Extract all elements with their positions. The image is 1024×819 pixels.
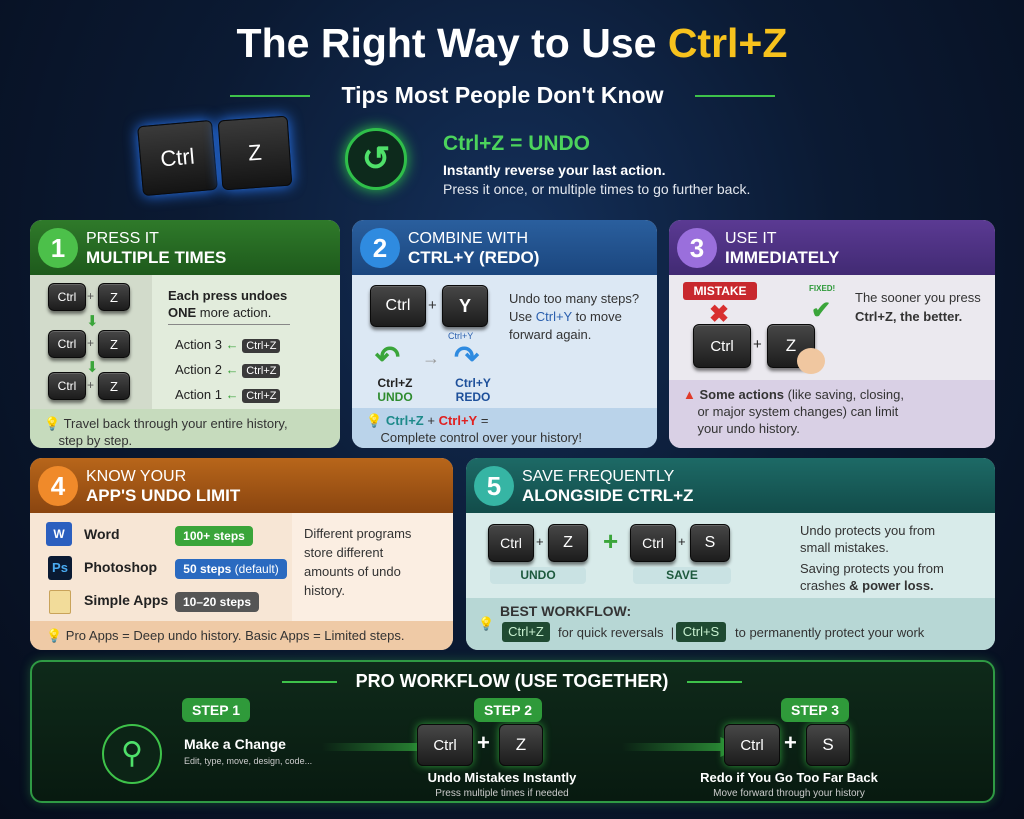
step 3: Move forward through your history: [713, 788, 865, 799]
step 2: +: [477, 730, 490, 755]
step 2: Undo Mistakes Instantly: [428, 770, 576, 785]
undo + save keys: +: [536, 534, 544, 549]
best workflow: for quick reversals |: [558, 625, 674, 640]
undo + save keys: +: [678, 534, 686, 549]
panel 3: [669, 220, 995, 448]
step 1: [102, 698, 312, 784]
key stack: [46, 283, 132, 406]
step 1: Edit, type, move, design, code...: [184, 756, 312, 766]
text: [168, 288, 287, 320]
panel 5: SAVE FREQUENTLY: [522, 468, 674, 485]
panel 5: [466, 458, 995, 650]
panel 4: 4: [51, 470, 65, 500]
app list: Ps: [52, 560, 68, 575]
app list: Simple Apps: [84, 592, 168, 608]
key stack: Ctrl: [58, 379, 76, 393]
undo + save keys: [486, 524, 732, 584]
undo redo icons: UNDO: [377, 390, 413, 404]
footer: Complete control over your history!: [380, 430, 582, 445]
undo redo icons: ↷: [454, 341, 479, 374]
footer tip: [30, 409, 340, 448]
warning footer: ▲ Some actions (like saving, closing,: [683, 387, 904, 402]
action list: Action 3 ← Ctrl+Z: [175, 337, 276, 352]
best workflow: Ctrl+S: [683, 624, 719, 639]
panel 2: Ctrl+Y: [448, 331, 473, 341]
best workflow: 💡: [478, 616, 494, 631]
panel 2: [352, 220, 657, 448]
subtitle: Tips Most People Don't Know: [342, 82, 663, 108]
arrow 2: [630, 737, 724, 757]
footer tip: step by step.: [58, 433, 132, 448]
step 3: Redo if You Go Too Far Back: [700, 770, 878, 785]
title: The Right Way to Use Ctrl+Z: [237, 20, 787, 66]
step 2: Press multiple times if needed: [435, 788, 569, 799]
text: [509, 291, 639, 342]
key stack: +: [87, 289, 94, 303]
hero text: Ctrl+Z = UNDO: [443, 132, 590, 155]
panel 2: COMBINE WITH: [408, 230, 528, 247]
step 3: STEP 3: [791, 702, 839, 718]
text: Each press undoes: [168, 288, 287, 303]
keys ctrl+y: +: [428, 297, 437, 314]
panel 5: Undo protects you from small mistakes.: [800, 523, 935, 555]
undo + save keys: UNDO: [520, 568, 556, 582]
undo + save keys: Ctrl: [642, 535, 664, 551]
undo redo icons: REDO: [456, 390, 490, 404]
footer: [30, 621, 453, 650]
panel 5: Saving protects you from crashes & power loss.: [800, 561, 944, 593]
undo + save keys: S: [705, 534, 715, 551]
step 2: Z: [516, 735, 526, 754]
panel 2: 2: [373, 232, 387, 262]
footer: 💡 Pro Apps = Deep undo history. Basic Apps = Limited steps.: [46, 628, 404, 643]
workflow heading: PRO WORKFLOW (USE TOGETHER): [356, 671, 668, 691]
action list: Action 2 ← Ctrl+Z: [175, 362, 276, 377]
keys ctrl+y: Ctrl: [386, 297, 410, 314]
panel 3: IMMEDIATELY: [725, 248, 839, 267]
hero text: Instantly reverse your last action.: [443, 162, 666, 178]
text: Use Ctrl+Y to move: [509, 309, 622, 324]
best workflow: Ctrl+Z: [508, 624, 544, 639]
app list: [46, 522, 287, 614]
best workflow: [466, 598, 995, 650]
panel 3: USE IT: [725, 230, 777, 247]
panel 4: APP'S UNDO LIMIT: [86, 486, 240, 505]
panel 4: [30, 458, 453, 650]
app list: 50 steps: [183, 562, 231, 576]
warning footer: [669, 380, 995, 448]
footer: 💡 Ctrl+Z + Ctrl+Y =: [366, 413, 488, 428]
footer tip: 💡 Travel back through your entire history,: [44, 416, 288, 431]
step 1: STEP 1: [192, 702, 240, 718]
mistake label: MISTAKE: [693, 284, 747, 298]
panel 3: +: [753, 336, 762, 353]
hero keys: Ctrl: [159, 144, 196, 171]
app list: W: [53, 527, 65, 541]
key stack: Z: [110, 336, 118, 352]
key stack: ⬇: [86, 313, 99, 330]
step 2: [412, 698, 576, 799]
panel 5: ALONGSIDE CTRL+Z: [522, 486, 693, 505]
step 1: Make a Change: [184, 736, 286, 752]
hero keys: Z: [247, 140, 263, 165]
panel 5: 5: [487, 470, 501, 500]
panel 1: 1: [51, 232, 65, 262]
keys: Ctrl: [710, 338, 734, 354]
keys: [693, 324, 751, 368]
undo redo icons: →: [422, 348, 440, 368]
panel 3: Ctrl+Z, the better.: [855, 309, 962, 324]
undo + save keys: Ctrl: [500, 535, 522, 551]
footer: [352, 408, 657, 448]
warning footer: your undo history.: [697, 421, 800, 436]
panel 3: The sooner you press: [855, 290, 981, 305]
app list: 10–20 steps: [183, 595, 251, 609]
step 1: ⚲: [121, 737, 143, 770]
keys ctrl+y: [368, 285, 490, 332]
warning footer: or major system changes) can limit: [697, 404, 898, 419]
key stack: Ctrl: [58, 290, 76, 304]
app list: (default): [235, 562, 279, 576]
undo redo icons: Ctrl+Y: [455, 376, 491, 390]
key stack: Ctrl: [58, 337, 76, 351]
pro workflow panel: [30, 660, 995, 803]
key stack: Z: [110, 378, 118, 394]
undo + save keys: +: [603, 526, 618, 556]
app list: Word: [84, 526, 120, 542]
arrow 1: [330, 743, 417, 751]
hero text: Press it once, or multiple times to go further back.: [443, 181, 750, 197]
action list: Action 1 ← Ctrl+Z: [175, 387, 276, 402]
panel 4: Different programs store different amounts of undo history.: [304, 526, 411, 598]
action list: [175, 337, 280, 403]
mistake label: [683, 282, 757, 300]
keys ctrl+y: Y: [459, 296, 471, 316]
text: forward again.: [509, 327, 591, 342]
key stack: +: [87, 378, 94, 392]
text: Undo too many steps?: [509, 291, 639, 306]
step 2: STEP 2: [484, 702, 532, 718]
panel 3: Z: [786, 336, 796, 355]
panel 3: 3: [690, 232, 704, 262]
icon: undo circle: ↺: [362, 140, 390, 178]
fixed: FIXED!: [809, 284, 835, 293]
app list: Photoshop: [84, 559, 157, 575]
step 3: S: [822, 735, 834, 754]
undo redo icons: [375, 341, 491, 404]
panel 3: ✖: [709, 301, 729, 328]
hero keys: [127, 106, 302, 206]
step 3: Ctrl: [740, 736, 764, 754]
undo redo icons: Ctrl+Z: [377, 376, 412, 390]
panel 2: CTRL+Y (REDO): [408, 248, 539, 267]
panel 1: MULTIPLE TIMES: [86, 248, 226, 267]
undo + save keys: Z: [563, 534, 573, 551]
key stack: Z: [110, 290, 118, 304]
panel 1: [30, 220, 340, 448]
key stack: ⬇: [86, 359, 99, 376]
step 2: Ctrl: [433, 736, 457, 754]
hero text: [443, 132, 750, 197]
undo + save keys: SAVE: [666, 568, 698, 582]
key stack: +: [87, 336, 94, 350]
app list: 100+ steps: [183, 529, 245, 543]
step 3: +: [784, 730, 797, 755]
undo redo icons: ↶: [375, 341, 400, 374]
panel 1: PRESS IT: [86, 230, 159, 247]
best workflow: BEST WORKFLOW:: [500, 603, 631, 619]
text: ONE more action.: [168, 305, 271, 320]
best workflow: to permanently protect your work: [735, 625, 924, 640]
panel 3: ✔: [811, 297, 831, 324]
panel 4: KNOW YOUR: [86, 468, 186, 485]
icon: undo circle: [345, 128, 407, 190]
step 3: [700, 698, 878, 799]
